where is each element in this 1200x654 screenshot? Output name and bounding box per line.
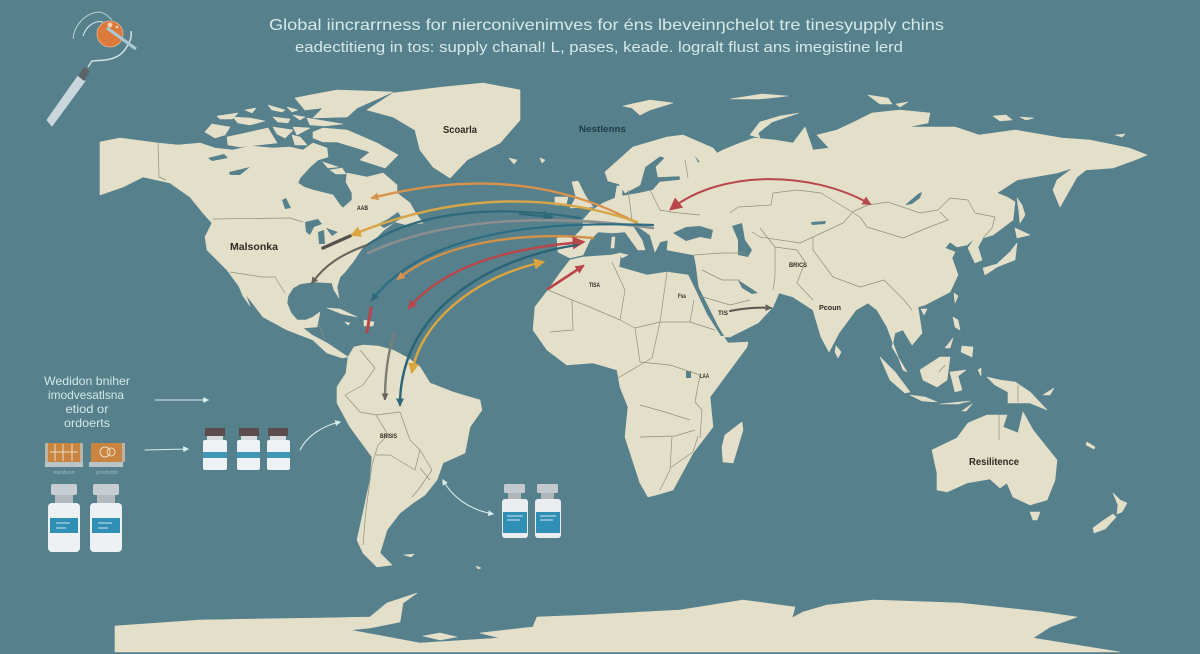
landmass: Antarctica [115,593,1120,652]
label: Arabia small: TIS [718,311,728,317]
arrow: teal and grey to Gulf coast [367,211,580,245]
arrow: red across Eurasia [671,179,870,209]
label: South America: BRISIS [380,434,397,440]
arrow: red double Iberia to Atlantic [409,242,583,308]
label: Australia: Resilitence [969,456,1019,468]
landmass: Arctic islands [205,90,545,174]
arrow: grey into South America [385,333,395,399]
landmass: Arctic Eurasia islands [623,94,1125,138]
arrow: orange Europe to Canada [372,184,637,223]
arrow: boxes to small vials [145,449,188,450]
icon: large vial left [48,484,80,552]
landmass: Madagascar [722,422,743,463]
arrow: grey to Gulf of Mexico [312,245,367,283]
icon: small vial 3 [267,428,290,470]
icon: small vial 1 [203,428,227,470]
text block: left note: Wedidon bniher [44,374,130,388]
landmass: Greenland [367,83,520,178]
landmass: Africa [533,253,748,497]
label: USA: Malsonka [230,241,278,253]
islands off Antarctica and South Atlantic [404,554,481,640]
icon: ocean vial left [502,484,528,538]
arrow: grey-mauve Mediterranean to US coast [368,220,653,253]
text block: left note: imodvesatlsna [48,388,124,402]
label: Central Asia: BRICS [789,263,807,269]
text block: left note: ordoerts [64,416,110,430]
landmass: Tasmania and New Zealand [1030,442,1127,533]
landmass: Asian islands [555,181,1054,411]
icon: probe with orange ball [47,12,136,126]
arrow: teal Iberia to South America [400,245,577,405]
label: India: Pcoun [819,305,841,312]
arrow: small vials to South America [300,422,340,450]
icon: large vial right [90,484,122,552]
arrow: dark segment in North America [323,236,350,248]
arrow: red short at Hispaniola [367,308,371,332]
label: Canada small: AAB [357,206,369,212]
label: East Africa: LAA [700,374,709,380]
arrow: double-headed South America to vials [443,480,493,514]
arrow: note to vials upper [155,399,208,401]
icon: orange box with grid [45,443,83,476]
arrow: dark over Arabia [730,308,771,311]
text block: left note [44,374,130,430]
icon: orange box with symbol: prodonts [96,470,118,476]
landmass: Baja California [235,277,250,306]
text block: left note: etiod or [66,402,108,416]
arrow: teal to the Caribbean [372,224,653,300]
arrow: orange to mid-Atlantic [398,236,593,279]
arrow: gold Atlantic to Guyana [412,262,543,372]
landmass: Caribbean islands [327,308,374,326]
label: Algeria small: TISA [589,283,601,289]
landmass: Eurasia [557,110,1147,372]
icon: small vial 2 [237,428,260,470]
landmass: South America [337,345,482,567]
arrow: red West Africa to Morocco [548,266,583,289]
landmass: Australia [932,412,1057,505]
label: Egypt small: Fss [678,294,687,300]
label: Arctic: Nestlenns [579,124,626,134]
arrow: gold Europe to North America [352,201,637,235]
world map [100,83,1147,652]
title [269,17,944,56]
inland seas [208,154,922,378]
flow arrows across the map [312,179,870,405]
icon: ocean vial right [535,484,561,538]
icon: orange box with symbol [89,443,125,476]
arrow: dark teal arrowhead mid-Atlantic [520,214,552,217]
title: Global iincrarrness for nierconivenimves for éns lbeveinŋchelot tre tinesyupply chins [269,17,944,34]
landmass: North America [100,138,423,358]
title: eadectitieng in tos: supply chanal! L, pases, keade. logralt flust ans imegistine lerd [295,39,903,56]
country borders [158,143,1018,545]
label: Greenland: Scoarla [443,125,477,136]
icon: orange box with grid: eaoduon [53,470,75,476]
map labels [230,124,1019,468]
